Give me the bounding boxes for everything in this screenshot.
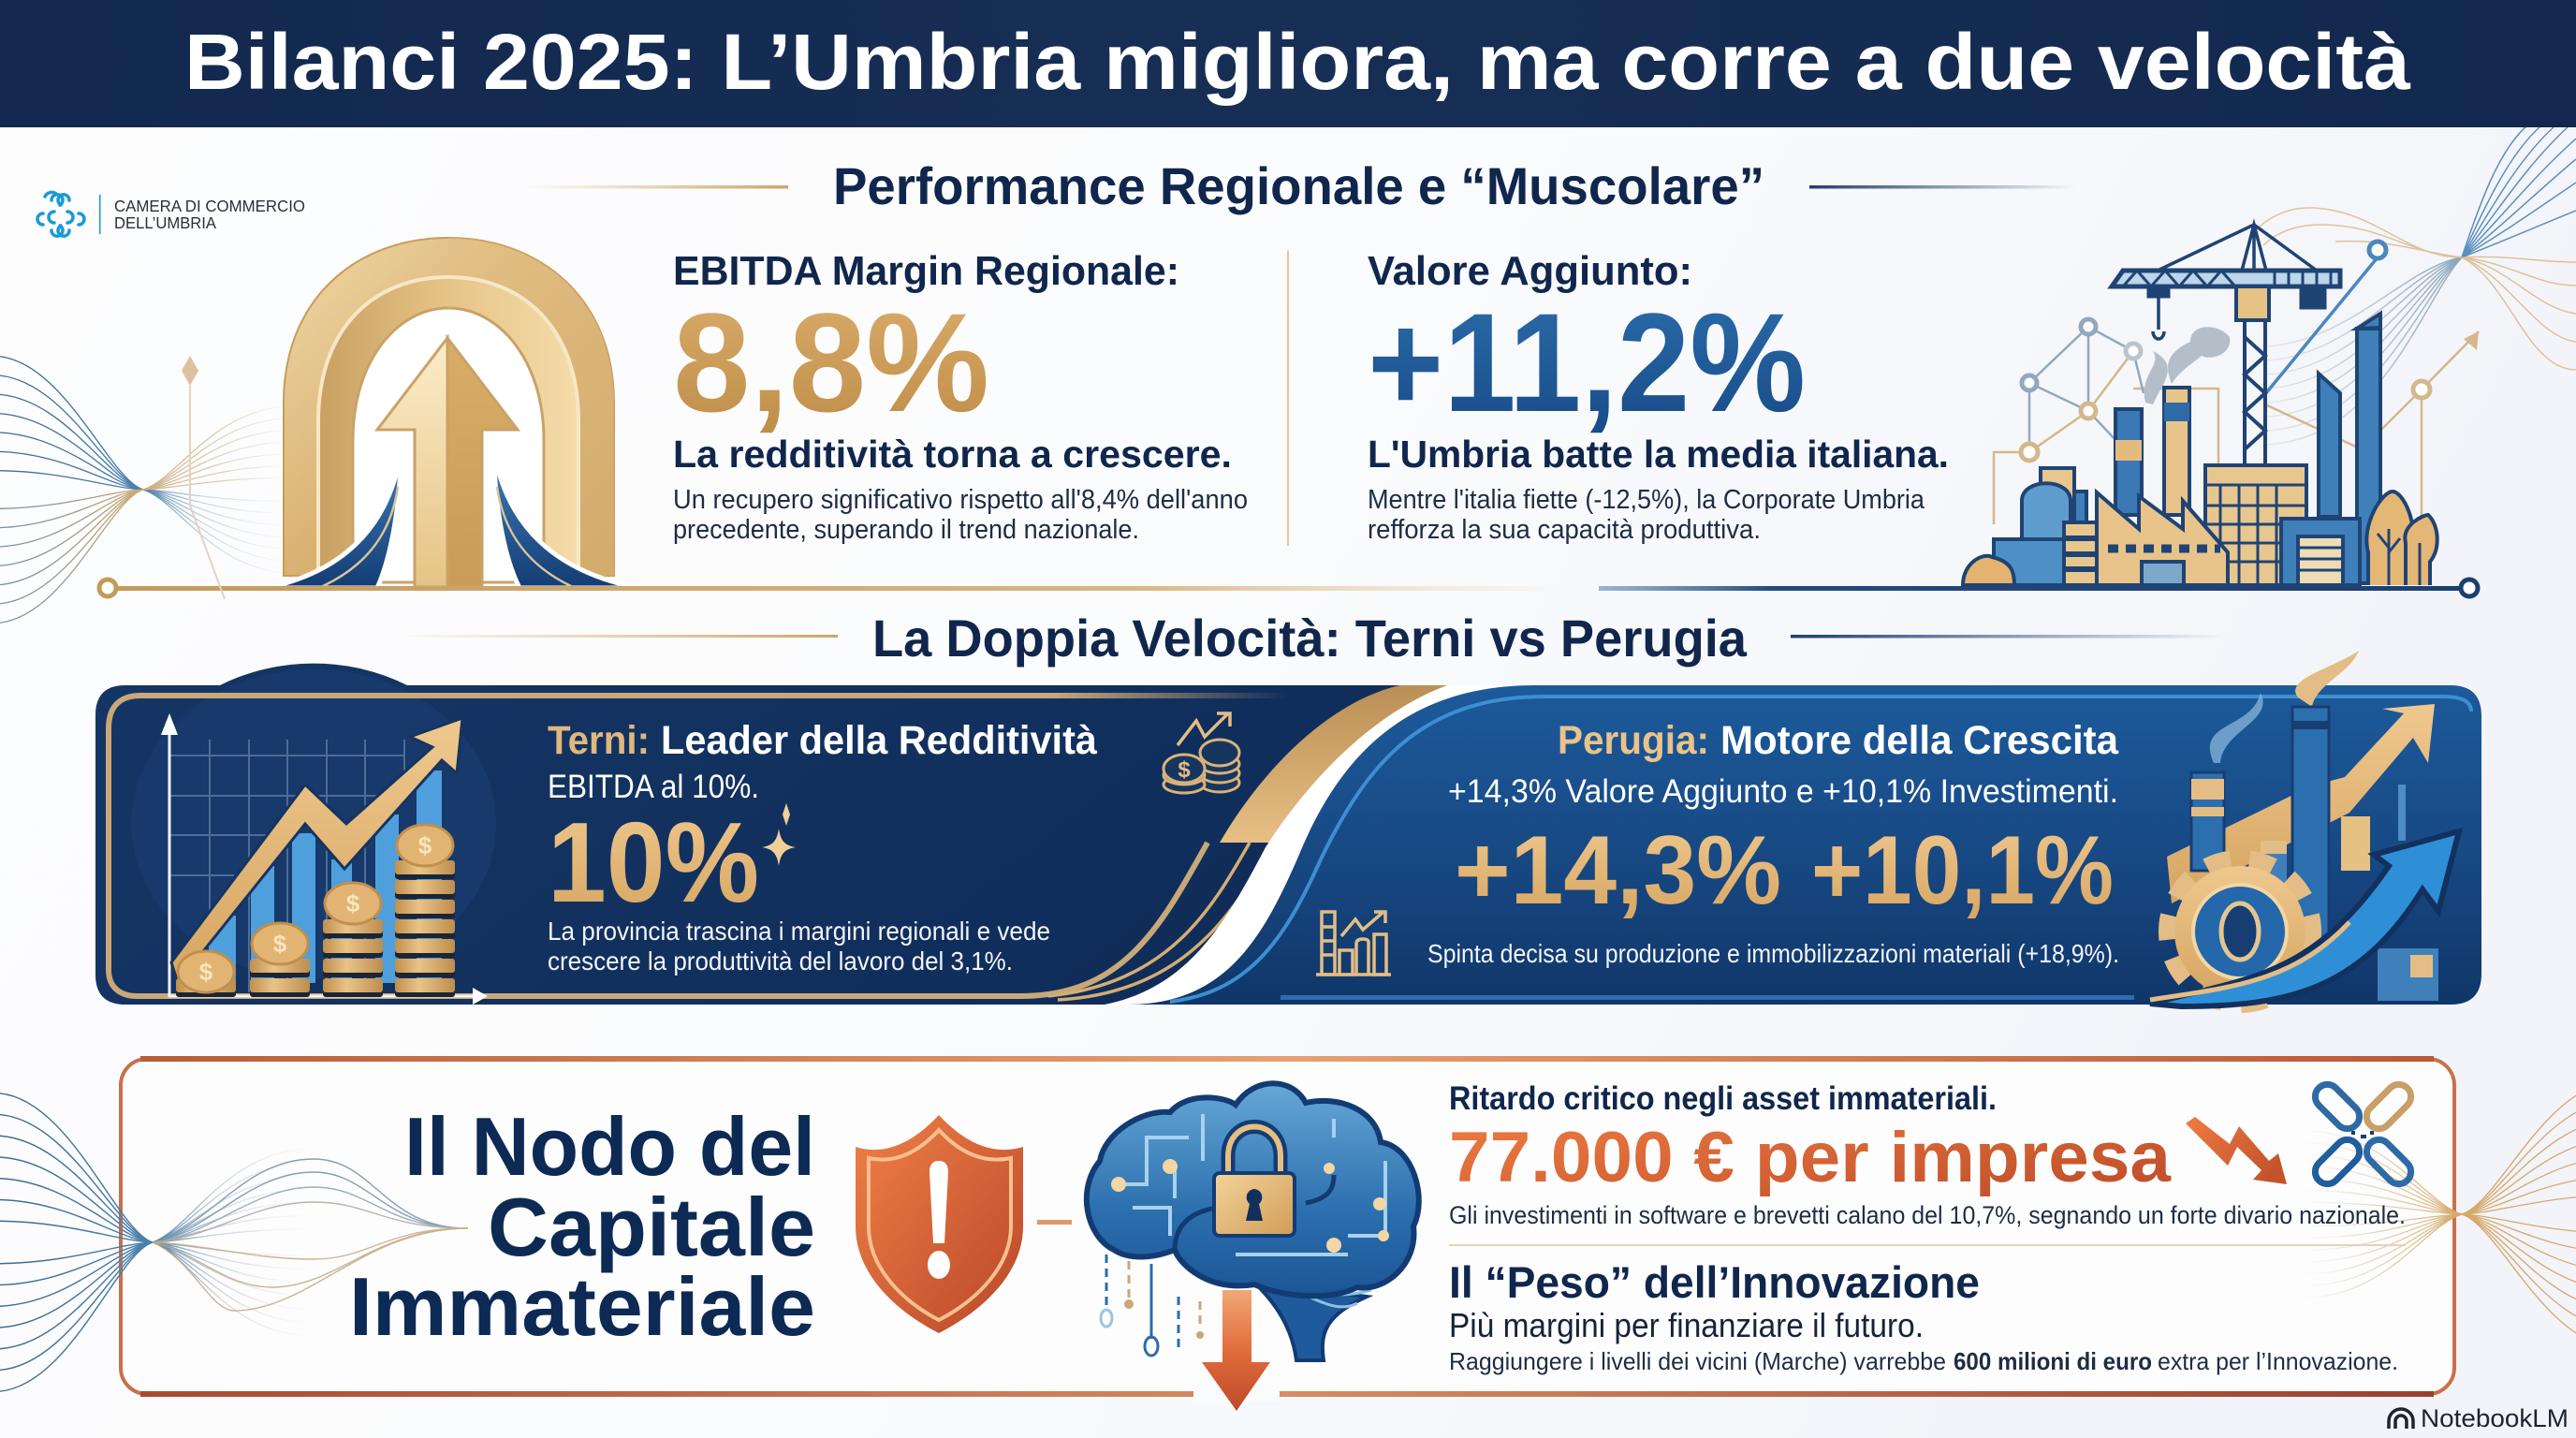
body text: [1368, 485, 1925, 545]
watermark: NotebookLM: NotebookLM: [2421, 1404, 2569, 1432]
subheading: +14,3% Valore Aggiunto e +10,1% Investimenti.: [1448, 773, 2118, 810]
chart backdrop circle: [131, 669, 496, 978]
icon: Perugia factory with gear and arrows: [2150, 651, 2459, 1006]
logo: Camera di Commercio dell'Umbria: CAMERA DI COMMERCIO: [114, 197, 305, 215]
body text: La provincia trascina i margini regionali e vede: [548, 917, 1050, 946]
body text: [673, 485, 1248, 545]
chart: Terni growth with coins: $: [418, 831, 432, 859]
panel: Terni background: [95, 664, 1556, 1005]
icon: data lines: [1101, 1255, 1204, 1356]
subheading: L'Umbria batte la media italiana.: [1368, 433, 1949, 476]
divider: [1449, 1244, 2406, 1246]
heading: Valore Aggiunto:: [1368, 248, 1692, 294]
chart: Terni growth with coins: $: [199, 958, 213, 986]
body text: precedente, superando il trend nazionale.: [673, 515, 1139, 545]
icon: brain with padlock: [1087, 1083, 1419, 1360]
heading: Terni:: [548, 718, 650, 763]
body text: [1449, 1347, 2398, 1375]
body text: Raggiungere i livelli dei vicini (Marche) varrebbe: [1449, 1347, 1946, 1375]
body text: Un recupero significativo rispetto all'8,4% dell'anno: [673, 485, 1248, 515]
big number 8,8%: 8,8%: [673, 284, 989, 441]
Perugia text block: Motore della Crescita: [1720, 718, 2119, 763]
icon: warning shield: [856, 1115, 1023, 1333]
big number +14,3%: +14,3%: [1455, 816, 1781, 925]
icon: golden arch with rising arrow: [267, 238, 638, 588]
body text: Gli investimenti in software e brevetti calano del 10,7%, segnando un forte divario nazionale.: [1449, 1201, 2406, 1229]
buildings: [1963, 314, 2437, 585]
big number 10%: 10%: [548, 799, 759, 926]
subheading: La redditività torna a crescere.: [673, 433, 1232, 476]
light blue edge: [1170, 697, 2471, 1002]
panel: EBITDA margin: [673, 248, 1248, 545]
logo: Camera di Commercio dell'Umbria: [37, 192, 305, 236]
panel: Terni vs Perugia banner: [95, 651, 2481, 1006]
heading: [349, 1100, 815, 1353]
chart: Terni growth with coins: $: [273, 930, 287, 958]
subheading: Ritardo critico negli asset immateriali.: [1449, 1080, 1997, 1117]
big number +11,2%: +11,2%: [1368, 284, 1806, 441]
header bar: [0, 0, 2576, 127]
heading: EBITDA Margin Regionale:: [673, 248, 1179, 294]
title: Bilanci 2025: L’Umbria migliora, ma corre a due velocità: [184, 18, 2410, 106]
body text: Spinta decisa su produzione e immobilizzazioni materiali (+18,9%).: [1427, 939, 2119, 968]
decorative diamond: [182, 356, 225, 599]
chart: Terni growth with coins: $: [346, 889, 360, 917]
icon: coins with trend arrow: [1164, 713, 1239, 793]
Terni text block: Leader della Redditività: [661, 718, 1098, 763]
section heading: performance: Performance Regionale e “Muscolare”: [833, 156, 1764, 215]
section heading: performance: [521, 156, 2076, 215]
Terni text block: [548, 718, 1098, 976]
crane: [2112, 225, 2340, 465]
chart: Terni growth with coins: [161, 713, 488, 1005]
baseline rule left and right: [99, 580, 2478, 596]
panel: Perugia background: [1128, 685, 2481, 1005]
section heading: doppia velocità: [386, 609, 2226, 668]
body text: extra per l’Innovazione.: [2158, 1347, 2398, 1375]
subheading: Il “Peso” dell’Innovazione: [1449, 1257, 1980, 1307]
text block: ritardo critico: [1449, 1080, 2406, 1229]
icon: broken chain: [2310, 1079, 2416, 1189]
panel frame: [121, 1059, 2454, 1394]
icon: sparkles: [762, 803, 796, 866]
icon: industrial skyline with crane: [1963, 225, 2479, 585]
big number: 77.000 euro: 77.000 € per impresa: [1449, 1118, 2172, 1197]
lead: Più margini per finanziare il futuro.: [1449, 1306, 1924, 1344]
gold swoosh: [1048, 685, 1449, 1000]
logo: Camera di Commercio dell'Umbria: DELL’UMBRIA: [114, 213, 216, 232]
big number +10,1%: +10,1%: [1811, 816, 2114, 925]
heading: Perugia:: [1558, 718, 1709, 763]
subheading: EBITDA al 10%.: [548, 769, 759, 805]
body text: refforza la sua capacità produttiva.: [1368, 515, 1761, 545]
body text: Mentre l'italia fiette (-12,5%), la Corporate Umbria: [1368, 485, 1925, 515]
heading: Capitale: [488, 1181, 815, 1273]
divider: [1287, 251, 1289, 546]
body text: crescere la produttività del lavoro del 3,1%.: [548, 946, 1013, 976]
chart backdrop bump: [131, 669, 496, 978]
icon: coins with trend arrow: $: [1178, 757, 1191, 783]
body text: [548, 917, 1050, 976]
body text: 600 milioni di euro: [1954, 1347, 2152, 1375]
white swoosh: [1105, 685, 1554, 1005]
section heading: doppia velocità: La Doppia Velocità: Terni vs Perugia: [872, 609, 1748, 668]
panel: valore aggiunto: [1368, 248, 1949, 545]
Perugia text block: [1427, 718, 2119, 968]
gold inner border: [109, 696, 1287, 996]
icon: zigzag down arrow: [2186, 1117, 2287, 1184]
panel: Il Nodo del Capitale Immateriale: [0, 1056, 2576, 1411]
heading: Immateriale: [349, 1260, 815, 1353]
text block: peso dell'innovazione: [1449, 1257, 2398, 1375]
icon: bar chart: [1316, 912, 1391, 975]
arrow: downward: [1193, 1290, 1280, 1411]
heading: Il Nodo del: [404, 1100, 815, 1193]
